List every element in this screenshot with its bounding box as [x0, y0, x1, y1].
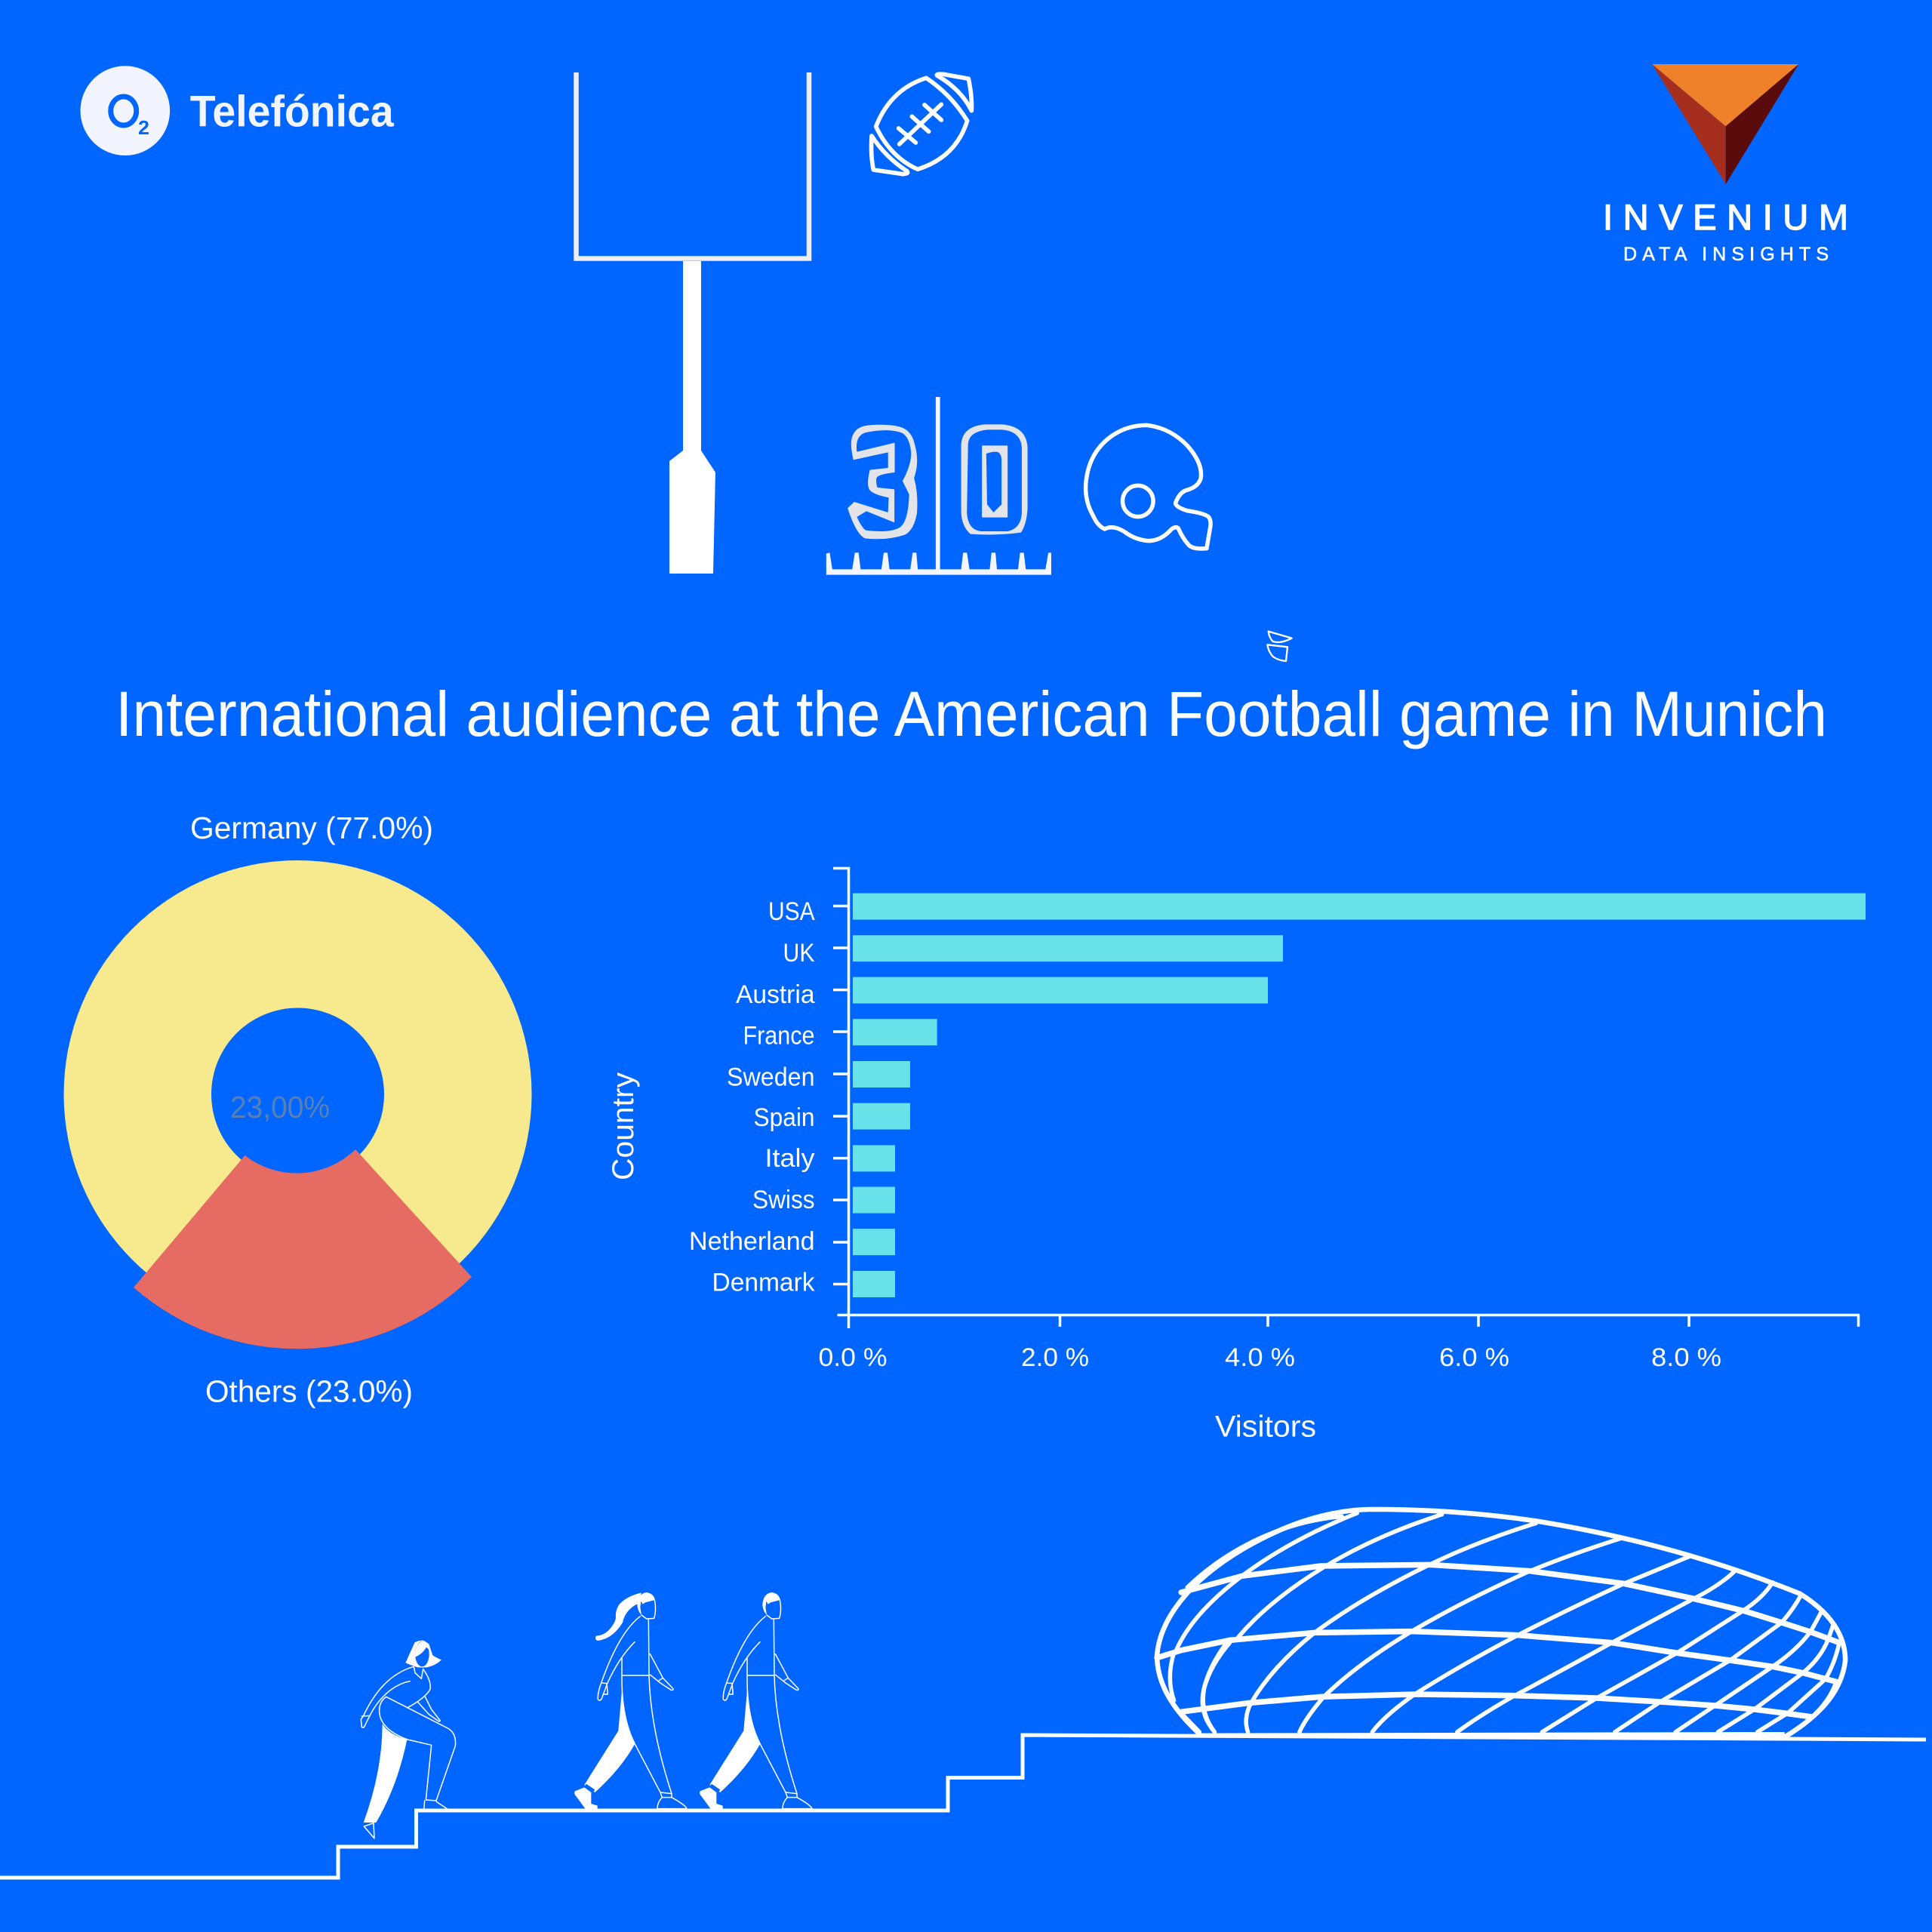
bar: UK — [853, 935, 1283, 961]
category label: UK: UK — [783, 939, 815, 968]
y axis title: Country — [607, 1072, 640, 1180]
category label: Netherland: Netherland — [689, 1227, 815, 1256]
donut segment: Others 23% — [134, 1149, 472, 1349]
illustration: woman walking with ponytail — [574, 1592, 687, 1809]
bar chart: visitors by country — [607, 868, 1866, 1443]
category label: France: France — [743, 1022, 815, 1051]
logo: Invenium — [1603, 64, 1848, 265]
stairs line — [0, 1735, 1926, 1878]
Invenium tagline: DATA INSIGHTS — [1623, 244, 1829, 265]
x tick label: 6.0 %: 6.0 % — [1439, 1343, 1509, 1372]
label: Germany: Germany (77.0%) — [190, 811, 433, 845]
icon: O2 circle — [80, 66, 170, 155]
bar: France — [853, 1019, 937, 1045]
category label: Italy: Italy — [765, 1144, 815, 1173]
label: Others: Others (23.0%) — [205, 1374, 413, 1409]
bar: Spain — [853, 1103, 910, 1130]
category label: USA: USA — [768, 897, 815, 926]
icon: goal post — [577, 72, 809, 574]
donut chart: Germany vs others — [63, 811, 531, 1409]
bar: USA — [853, 894, 1866, 920]
bar: Austria — [853, 977, 1268, 1004]
icon: football helmet — [1086, 425, 1211, 549]
illustration: man walking — [700, 1592, 812, 1809]
x tick label: 4.0 %: 4.0 % — [1225, 1343, 1295, 1372]
icon: O2 circle: 2 — [138, 116, 149, 139]
icon: american football — [872, 74, 971, 174]
category label: Spain: Spain — [753, 1103, 815, 1132]
bar: Swiss — [853, 1187, 895, 1214]
icon: inverted pyramid — [1652, 64, 1798, 184]
bar: Denmark — [853, 1271, 895, 1297]
centre value: 23,00% — [230, 1090, 330, 1124]
bar: Netherland — [853, 1229, 895, 1255]
category label: Sweden: Sweden — [727, 1063, 815, 1092]
bar: Sweden — [853, 1061, 910, 1088]
x axis title: Visitors — [1215, 1410, 1316, 1443]
bar: Italy — [853, 1145, 895, 1171]
category label: Swiss: Swiss — [752, 1186, 815, 1214]
x tick label: 0.0 %: 0.0 % — [818, 1343, 888, 1372]
category label: Austria: Austria — [736, 980, 815, 1009]
x tick label: 8.0 %: 8.0 % — [1651, 1343, 1721, 1372]
icon: small football end caps — [1267, 632, 1292, 661]
x axis — [838, 1315, 1860, 1327]
y axis — [833, 868, 848, 1328]
icon: yard line 30 marker — [826, 397, 1051, 575]
title: International audience at the American Football game in Munich — [115, 678, 1827, 749]
donut segment: Germany 77% — [63, 860, 531, 1328]
illustration: woman climbing step — [361, 1641, 456, 1838]
x tick label: 2.0 %: 2.0 % — [1021, 1343, 1089, 1372]
Invenium wordmark: INVENIUM — [1603, 197, 1848, 237]
illustration: Allianz Arena stadium — [1157, 1509, 1845, 1738]
brand name: Telefónica — [190, 87, 394, 136]
logo: O2 Telefónica — [80, 66, 394, 155]
category label: Denmark: Denmark — [712, 1269, 815, 1297]
